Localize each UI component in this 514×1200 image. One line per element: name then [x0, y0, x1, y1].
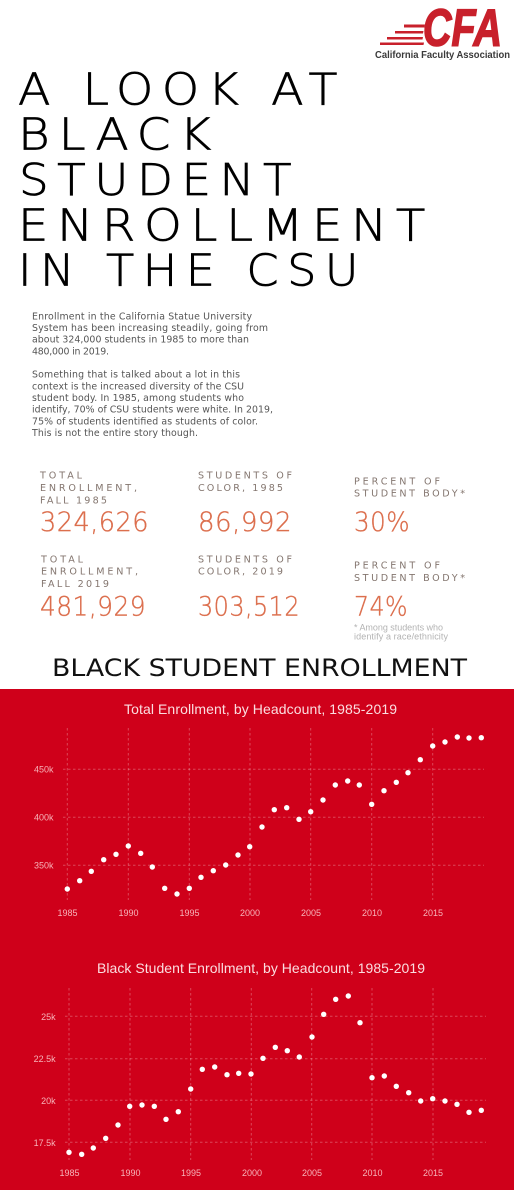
stat: percent of student body 1985: 30% — [354, 507, 410, 538]
title — [18, 64, 434, 297]
intro text block: System has been increasing steadily, going from — [32, 323, 268, 334]
stat: percent of student body 2019 — [354, 561, 465, 622]
x axis labels: total enrollment: 2005 — [301, 908, 321, 918]
stat: students of color 1985: STUDENTS OF — [198, 471, 292, 482]
x axis labels: black student enrollment: 2010 — [362, 1168, 383, 1178]
logo: California Faculty Association — [375, 0, 510, 61]
chart title: total enrollment: Total Enrollment, by Headcount, 1985-2019 — [124, 701, 397, 717]
stat: percent of student body 2019: 74% — [354, 591, 408, 622]
x axis labels: total enrollment: 2010 — [362, 908, 382, 918]
y axis labels: total enrollment: 350k — [34, 860, 54, 870]
heading: black student enrollment: BLACK STUDENT ENROLLMENT — [52, 654, 467, 682]
x axis labels: black student enrollment — [59, 1168, 443, 1178]
title: ENROLLMENT — [18, 200, 434, 251]
stat: students of color 1985 — [198, 471, 292, 538]
title: IN THE CSU — [18, 246, 367, 297]
stat: students of color 1985: COLOR, 1985 — [198, 483, 283, 494]
stat: percent of student body 1985: STUDENT BODY* — [354, 488, 465, 500]
chart: black student enrollment — [34, 960, 486, 1178]
title: STUDENT — [19, 155, 300, 206]
stat: percent of student body 2019: STUDENT BODY* — [354, 573, 465, 584]
y axis labels: black student enrollment: 17.5k — [34, 1138, 56, 1148]
intro text block: 75% of students identified as students of color. — [32, 416, 258, 427]
stat: total enrollment 1985: 324,626 — [40, 507, 149, 538]
stat: total enrollment 1985: ENROLLMENT, — [40, 483, 137, 494]
y axis labels: black student enrollment: 22.5k — [34, 1054, 56, 1064]
y axis labels: black student enrollment: 20k — [41, 1096, 56, 1106]
stat: total enrollment 2019: FALL 2019 — [41, 579, 109, 590]
intro text block: Enrollment in the California Statue University — [32, 311, 252, 322]
stat: total enrollment 1985: FALL 1985 — [40, 495, 107, 506]
x axis labels: black student enrollment: 1995 — [181, 1168, 201, 1178]
y axis labels: total enrollment — [34, 764, 54, 870]
footnote: identify a race/ethnicity — [354, 631, 448, 641]
x axis labels: black student enrollment: 1990 — [120, 1168, 141, 1178]
intro text block: student body. In 1985, among students who — [32, 393, 244, 404]
x axis labels: total enrollment: 1995 — [179, 908, 200, 918]
stat: percent of student body 2019: PERCENT OF — [354, 561, 440, 572]
stat: total enrollment 2019: TOTAL — [40, 554, 84, 565]
x axis labels: total enrollment: 1990 — [118, 908, 139, 918]
stat: students of color 1985: 86,992 — [198, 507, 292, 538]
panel: red chart background — [0, 689, 514, 1190]
stat: total enrollment 2019: ENROLLMENT, — [41, 567, 138, 578]
stat: students of color 2019 — [198, 554, 300, 622]
x axis labels: black student enrollment: 2015 — [423, 1168, 443, 1178]
x axis labels: total enrollment — [57, 908, 443, 918]
chart title: black student enrollment: Black Student Enrollment, by Headcount, 1985-2019 — [97, 960, 425, 976]
stat: total enrollment 2019 — [40, 554, 146, 622]
title: A LOOK AT — [18, 64, 346, 115]
footnote — [354, 622, 448, 641]
x axis labels: total enrollment: 2015 — [423, 908, 443, 918]
x axis labels: black student enrollment: 1985 — [59, 1168, 80, 1178]
footnote: * Among students who — [354, 622, 443, 632]
stat: students of color 2019: 303,512 — [198, 591, 300, 622]
y axis labels: black student enrollment — [34, 1012, 56, 1148]
x axis labels: total enrollment: 1985 — [57, 908, 78, 918]
title: BLACK — [18, 110, 220, 161]
intro text block: This is not the entire story though. — [31, 428, 198, 439]
y axis labels: total enrollment: 400k — [34, 812, 54, 822]
x axis labels: black student enrollment: 2000 — [242, 1168, 262, 1178]
stat: total enrollment 1985 — [39, 471, 149, 538]
intro text block: identify, 70% of CSU students were white. In 2019, — [32, 405, 273, 416]
x axis labels: total enrollment: 2000 — [240, 908, 260, 918]
intro text block: context is the increased diversity of the CSU — [32, 381, 244, 392]
stat: percent of student body 1985: PERCENT OF — [354, 476, 440, 487]
intro text block: Something that is talked about a lot in this — [32, 370, 240, 381]
intro text block: 480,000 in 2019. — [32, 346, 109, 357]
stat: percent of student body 1985 — [354, 476, 465, 538]
y axis labels: total enrollment: 450k — [34, 764, 54, 774]
stat: total enrollment 1985: TOTAL — [39, 471, 83, 482]
y axis labels: black student enrollment: 25k — [41, 1012, 56, 1022]
stat: students of color 2019: STUDENTS OF — [198, 554, 292, 565]
intro text block: about 324,000 students in 1985 to more than — [32, 335, 249, 346]
chart: total enrollment — [34, 701, 484, 918]
x axis labels: black student enrollment: 2005 — [302, 1168, 322, 1178]
stat: students of color 2019: COLOR, 2019 — [198, 567, 283, 578]
stat: total enrollment 2019: 481,929 — [40, 591, 146, 622]
intro text block — [31, 311, 273, 439]
data points: black student enrollment — [66, 993, 484, 1157]
data points: total enrollment — [65, 734, 484, 897]
